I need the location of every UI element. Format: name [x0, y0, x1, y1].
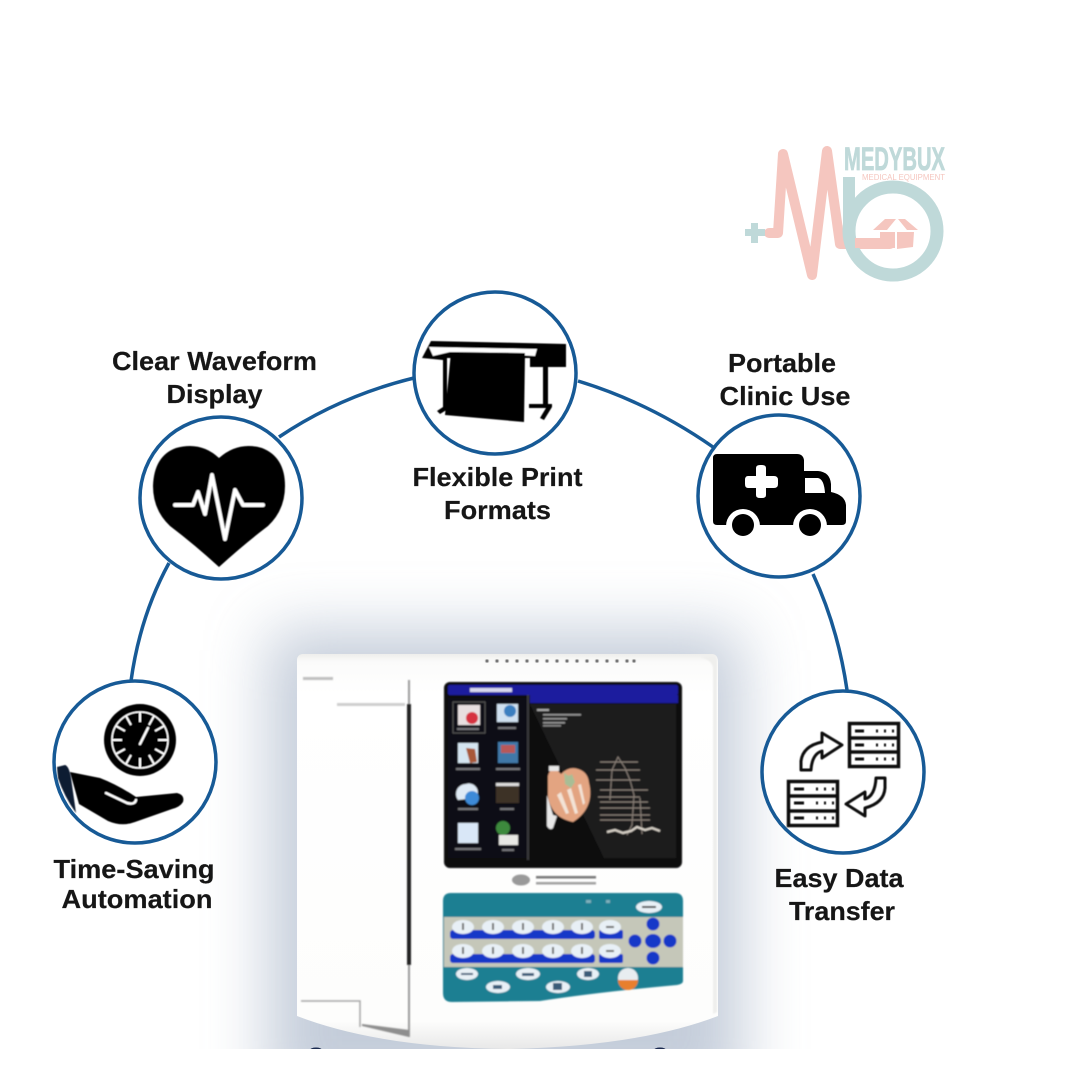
circle [140, 417, 302, 579]
logo box [873, 219, 918, 249]
icon: wide-format printer [422, 341, 566, 422]
icon: heart with pulse [153, 446, 285, 567]
logo: Medybux [745, 141, 945, 275]
node: flexible print formats: Formats [444, 495, 551, 525]
lead sockets row [485, 659, 636, 663]
circle [698, 415, 860, 577]
heading: Clear Waveform [112, 346, 317, 376]
node: portable clinic use: Clinic Use [720, 381, 850, 411]
server bottom [788, 782, 838, 826]
heading: Portable [728, 348, 836, 378]
icon: clock over hand [57, 704, 183, 824]
node: clear waveform display [112, 346, 317, 579]
logo plus [745, 223, 765, 243]
screen labels [537, 709, 549, 711]
arrow: up right [801, 733, 842, 770]
printer compartment [301, 677, 409, 1037]
arrow: down left [846, 778, 885, 816]
device right rim [708, 659, 717, 1013]
heading: Time-Saving [54, 854, 214, 884]
keypad number keys [450, 930, 623, 963]
device backdrop glow [268, 630, 742, 1080]
device body [297, 654, 718, 1049]
connecting arcs [131, 378, 847, 690]
logo ring letter b [843, 177, 937, 275]
keypad [443, 893, 683, 1002]
logo heartbeat baseline [855, 232, 895, 248]
screen menu icons [453, 702, 519, 845]
screen waveforms [596, 757, 650, 835]
logo tagline: MEDICAL EQUIPMENT [862, 173, 945, 182]
keypad arrow keys [628, 918, 676, 964]
ECG device [297, 654, 718, 1052]
device feet [310, 1048, 666, 1049]
logo heartbeat M [769, 151, 890, 275]
node: time-saving automation [54, 681, 216, 914]
node: easy data transfer: Transfer [789, 896, 895, 926]
heading: Flexible Print [412, 462, 583, 492]
brand mark [512, 874, 596, 886]
node: clear waveform display: Display [166, 379, 263, 409]
icon: ambulance [713, 454, 846, 536]
node: portable clinic use [698, 348, 860, 577]
heading: Easy Data [774, 863, 904, 893]
keypad function keys [456, 968, 599, 993]
circle [762, 691, 924, 853]
node: time-saving automation: Automation [62, 884, 212, 914]
keypad status dots [586, 900, 610, 903]
screen heart illustration [547, 766, 590, 829]
screen icon captions [455, 727, 520, 851]
circle [414, 292, 576, 454]
icon: servers exchanging data [788, 724, 898, 826]
keypad power key [616, 967, 640, 982]
node: easy data transfer [762, 691, 924, 926]
circle [54, 681, 216, 843]
keypad start key [636, 901, 662, 913]
server top [850, 724, 898, 766]
node: flexible print formats [412, 292, 583, 525]
logo wordmark: MEDYBUX [844, 141, 945, 177]
screen [444, 682, 682, 868]
screen title bar [448, 685, 678, 695]
